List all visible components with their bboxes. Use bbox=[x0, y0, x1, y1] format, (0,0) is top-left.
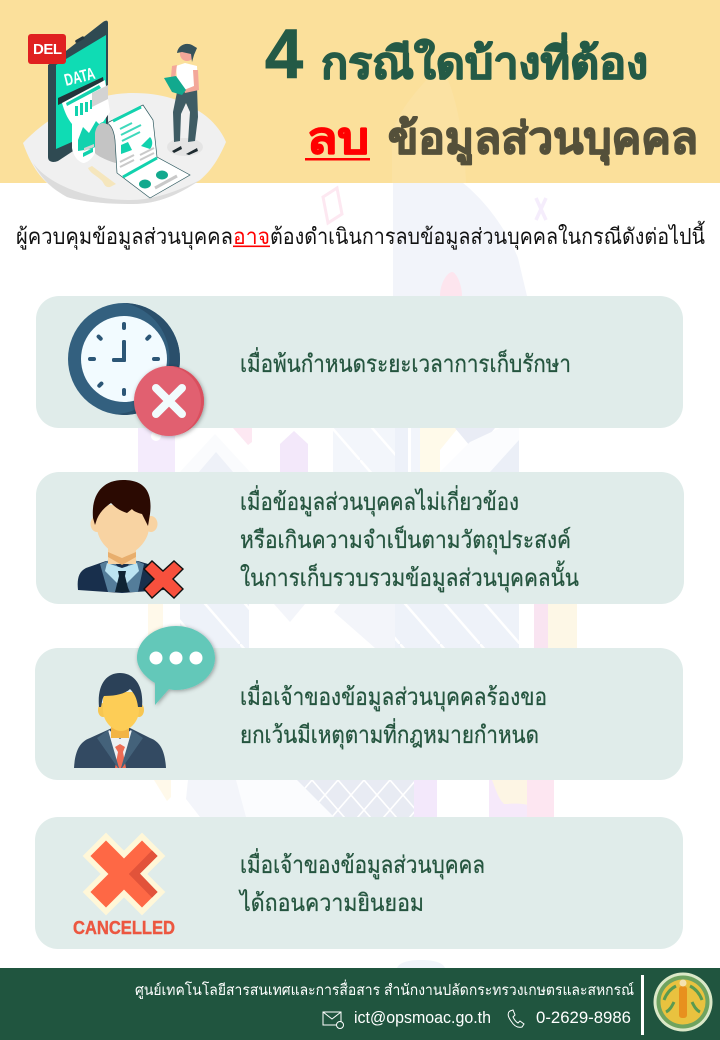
panel 4: consent withdrawn bbox=[35, 817, 683, 949]
title line 2: ข้อมูลส่วนบุคคล bbox=[388, 115, 698, 166]
icon: person with speech bubble bbox=[74, 626, 215, 768]
illustration: deleting data from phone bbox=[23, 21, 226, 204]
panel 2 text: หรือเกินความจำเป็นตามวัตถุประสงค์ bbox=[240, 525, 571, 555]
footer phone: 0-2629-8986 bbox=[536, 1008, 631, 1027]
intro text bbox=[16, 221, 705, 250]
panel 3 text bbox=[240, 680, 547, 750]
icon: cancelled cross: CANCELLED bbox=[73, 918, 175, 938]
header band bbox=[0, 0, 720, 183]
DEL badge bbox=[28, 34, 66, 64]
title line 1: กรณีใดบ้างที่ต้อง bbox=[321, 33, 648, 88]
icon: clock with cross bbox=[68, 303, 204, 436]
intro text: อาจ bbox=[233, 224, 270, 249]
title line 1: 4 bbox=[265, 15, 303, 93]
icon: cancelled cross bbox=[73, 850, 175, 938]
background watermark bbox=[138, 183, 577, 968]
icon: email bbox=[323, 1012, 344, 1028]
icon: phone bbox=[508, 1010, 524, 1027]
DEL badge: DEL bbox=[33, 41, 62, 58]
panel 2: not relevant bbox=[36, 472, 684, 604]
icon: person with cross bbox=[78, 480, 183, 598]
footer bar bbox=[0, 968, 720, 1040]
panel 4 text: เมื่อเจ้าของข้อมูลส่วนบุคคล bbox=[240, 848, 485, 880]
panel 4 text: ได้ถอนความยินยอม bbox=[238, 889, 424, 917]
panel 2 text bbox=[240, 485, 579, 593]
intro text: ผู้ควบคุมข้อมูลส่วนบุคคล bbox=[16, 224, 233, 250]
illustration: deleting data from phone: DATA bbox=[62, 64, 97, 90]
panel 2 text: เมื่อข้อมูลส่วนบุคคลไม่เกี่ยวข้อง bbox=[240, 485, 519, 517]
footer email: ict@opsmoac.go.th bbox=[354, 1008, 491, 1027]
panel 3 text: เมื่อเจ้าของข้อมูลส่วนบุคคลร้องขอ bbox=[240, 680, 547, 712]
footer organisation name: ศูนย์เทคโนโลยีสารสนเทศและการสื่อสาร สำนักงานปลัดกระทรวงเกษตรและสหกรณ์ bbox=[135, 979, 634, 999]
panel 4 text bbox=[238, 848, 485, 917]
panel 3: owner request bbox=[35, 626, 683, 780]
panel 2 text: ในการเก็บรวบรวมข้อมูลส่วนบุคคลนั้น bbox=[240, 560, 579, 593]
emblem bbox=[654, 972, 712, 1032]
title line 1 bbox=[265, 15, 648, 93]
panel 1 text: เมื่อพ้นกำหนดระยะเวลาการเก็บรักษา bbox=[240, 347, 571, 378]
panel 3 text: ยกเว้นมีเหตุตามที่กฎหมายกำหนด bbox=[240, 718, 539, 750]
panel 1: retention expired bbox=[36, 296, 683, 436]
title line 2: ลบ bbox=[307, 115, 369, 163]
